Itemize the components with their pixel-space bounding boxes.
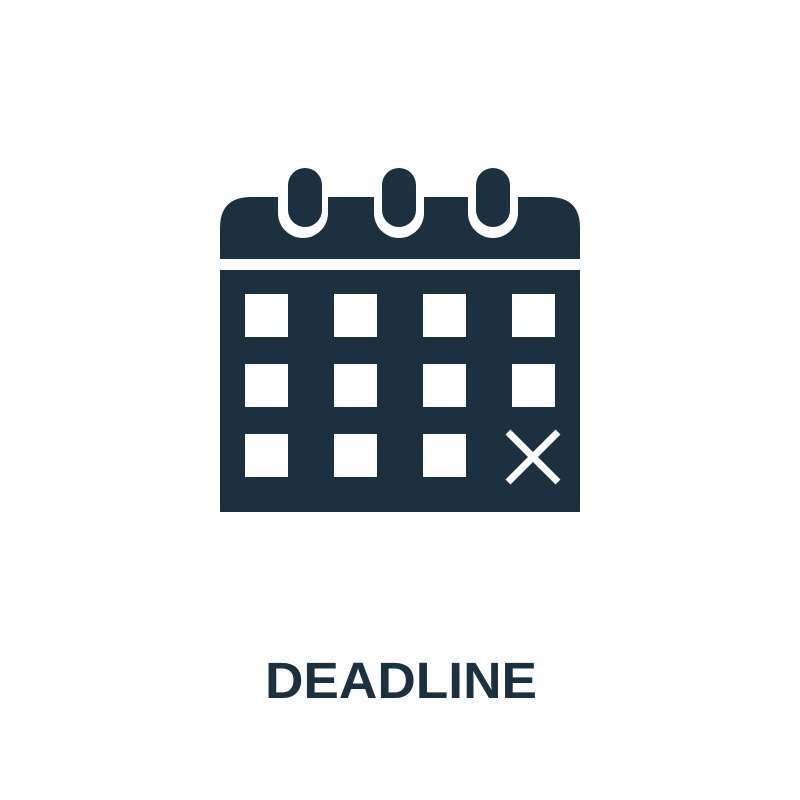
title: DEADLINE — [265, 652, 537, 709]
calendar body — [220, 270, 580, 512]
ring cutouts — [278, 160, 518, 238]
day squares — [245, 294, 555, 477]
icon: calendar — [220, 160, 580, 512]
deadline cross mark — [508, 432, 558, 482]
rings — [288, 168, 510, 227]
calendar header — [220, 197, 580, 259]
